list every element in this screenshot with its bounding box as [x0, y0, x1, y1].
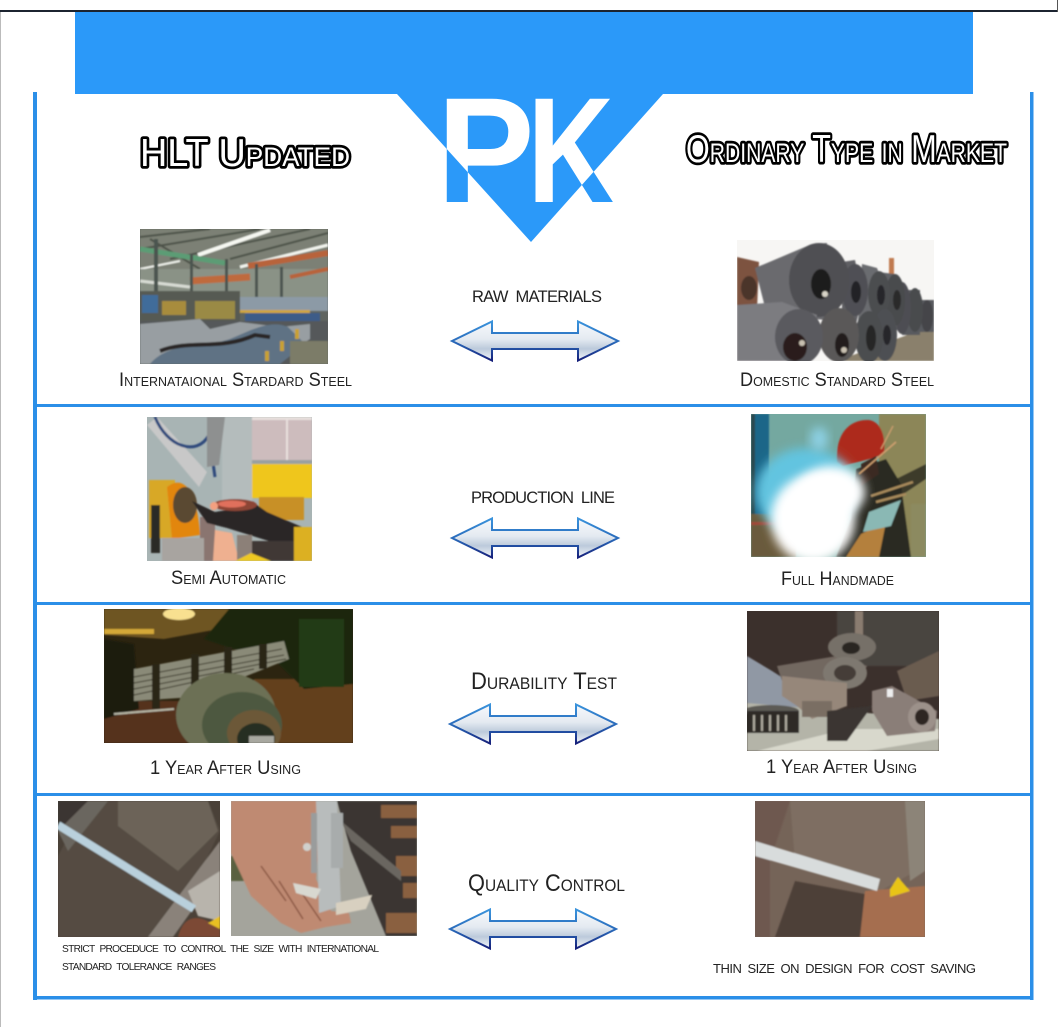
arrow: durability comparison — [450, 704, 616, 744]
caption: Semi Automatic: Semi Automatic — [171, 568, 286, 589]
label: quality control: Quality Control — [468, 870, 625, 897]
label: raw materials: RAW MATERIALS — [472, 288, 602, 306]
top blue banner — [75, 12, 973, 94]
caption: Full Handmade: Full Handmade — [781, 569, 894, 590]
label: durability test: Durability Test — [471, 668, 617, 695]
photo: ordinary worn parts — [743, 611, 939, 751]
photo: HLT axle after one year — [104, 608, 353, 758]
photo: steel coils — [737, 240, 934, 365]
caption: Internataional Stardard Steel: Internataional Stardard Steel — [119, 370, 352, 391]
caption: 1 Year After Using (ordinary): 1 Year After Using — [766, 757, 917, 778]
arrow: production line comparison — [452, 518, 618, 558]
caption: strict procedure note: STRICT PROCEDUCE TO CONTROL THE SIZE WITH INTERNATIONAL — [62, 944, 379, 955]
PK logo: K — [528, 66, 614, 234]
label: production line: PRODUCTION LINE — [471, 489, 615, 507]
caption: thin size note: THIN SIZE ON DESIGN FOR COST SAVING — [713, 961, 976, 976]
heading: HLT Updated: HLT Updated — [140, 132, 350, 175]
photo: manual welder — [751, 414, 926, 563]
caption: strict procedure note: STANDARD TOLERANCE RANGES — [62, 962, 216, 973]
arrow: quality control comparison — [450, 910, 616, 948]
arrow: raw materials comparison — [452, 322, 618, 360]
photo: measuring thick part with tape — [58, 801, 220, 937]
PK logo: P — [437, 66, 534, 234]
caption: strict procedure note — [62, 944, 379, 973]
photo: semi automatic welding robot — [147, 417, 312, 561]
PK logo: K — [528, 66, 614, 234]
PK logo: P — [437, 66, 534, 234]
photo: hand with vernier caliper — [231, 801, 417, 936]
photo: steel factory — [140, 229, 328, 364]
caption: Domestic Standard Steel: Domestic Standard Steel — [740, 370, 934, 391]
caption: 1 Year After Using (HLT): 1 Year After Using — [150, 758, 301, 779]
photo: measuring thin part with tape — [755, 801, 925, 937]
PK logo — [397, 94, 663, 242]
